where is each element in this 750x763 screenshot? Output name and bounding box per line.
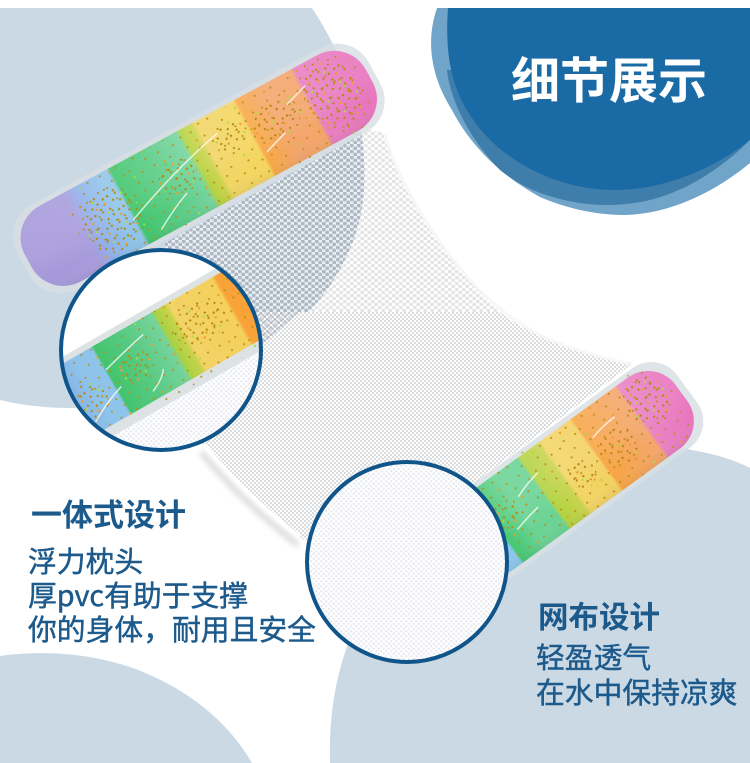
body line 3: 你的身体，耐用且安全 xyxy=(28,615,316,647)
body line 2: 在水中保持凉爽 xyxy=(536,678,738,710)
glitter cluster pink xyxy=(613,367,680,435)
lens white background xyxy=(61,250,261,450)
tube outer clear skin xyxy=(0,31,397,306)
body line 1: 浮力枕头 xyxy=(28,547,143,579)
mesh rim shadow xyxy=(201,452,298,545)
mesh over blue lower xyxy=(256,312,298,344)
text block: one-piece design xyxy=(28,498,316,647)
mesh lower part xyxy=(170,312,632,566)
tube shine xyxy=(8,38,390,299)
glitter cluster green xyxy=(486,494,528,536)
title text: 细节展示 xyxy=(511,55,707,109)
glitter cluster yellow xyxy=(207,115,252,156)
mesh fabric xyxy=(165,130,632,566)
lens tube xyxy=(63,268,259,436)
tube shine xyxy=(435,357,707,589)
magnifier lens: mesh detail xyxy=(307,462,507,662)
body line 2: 厚pvc有助于支撑 xyxy=(28,574,248,615)
tube rainbow chambers xyxy=(435,357,707,589)
lens glitter cluster yellow xyxy=(174,300,226,344)
glitter xyxy=(58,42,385,272)
mesh upper part xyxy=(165,130,500,312)
mesh over blue xyxy=(165,134,364,312)
background shape: bottom-left pale blue circle xyxy=(0,653,252,763)
title badge xyxy=(431,8,750,215)
background shape: bottom-right pale blue circle xyxy=(330,444,750,763)
lens glitter cluster green xyxy=(120,353,152,382)
glitter cluster orange xyxy=(591,420,647,476)
mesh white rim xyxy=(204,445,300,537)
float tube: bottom pillow xyxy=(432,349,716,593)
badge back layer xyxy=(431,8,750,215)
mesh detail fill xyxy=(307,462,507,662)
float tube: top pillow xyxy=(0,31,397,306)
lens ring xyxy=(61,250,261,450)
badge front layer xyxy=(447,8,750,190)
glitter cluster pink xyxy=(290,49,374,139)
glitter xyxy=(458,359,703,571)
tube rainbow chambers xyxy=(8,38,390,299)
magnifier lens: pillow detail xyxy=(59,248,263,452)
body line 1: 轻盈透气 xyxy=(536,643,651,675)
highlight streaks xyxy=(116,86,333,239)
lens tube chambers xyxy=(64,272,258,430)
badge middle layer xyxy=(447,70,750,205)
heading: 一体式设计 xyxy=(31,498,186,533)
lens contents xyxy=(63,268,259,448)
heading: 网布设计 xyxy=(538,601,660,635)
glitter cluster center xyxy=(152,152,205,202)
background shape: top-left pale blue circle xyxy=(0,8,365,408)
glitter cluster orange xyxy=(242,91,308,149)
highlight streaks xyxy=(497,417,635,530)
lens mesh xyxy=(115,352,259,448)
lens highlight streaks xyxy=(95,334,164,422)
top white strip xyxy=(0,0,750,8)
glitter cluster left xyxy=(71,177,154,262)
lens glitter cluster left xyxy=(74,385,109,420)
tube outer clear skin xyxy=(432,349,716,593)
mesh detail ring xyxy=(307,462,507,662)
lens tube skin xyxy=(63,268,259,436)
mesh right rim xyxy=(385,135,632,364)
glitter cluster yellow xyxy=(563,455,602,494)
text block: mesh design xyxy=(536,601,738,710)
lens tube glitter xyxy=(70,274,256,426)
